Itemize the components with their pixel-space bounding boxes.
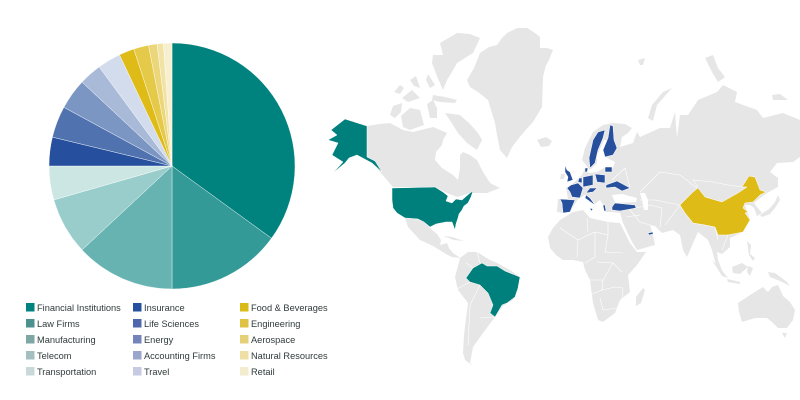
legend column 3: Engineering — [251, 319, 300, 329]
slice: Energy — [64, 82, 172, 166]
highlighted United States: teal — [328, 119, 520, 317]
Svalbard — [638, 58, 645, 65]
legend column 1: Financial Institutions — [37, 303, 121, 313]
Italy — [585, 195, 595, 205]
legend column 2: Life Sciences — [144, 319, 199, 329]
Spain — [560, 199, 575, 213]
Mexico and Central America — [405, 218, 460, 258]
slice: Manufacturing — [82, 166, 172, 289]
slice: Engineering — [134, 45, 172, 166]
Finland — [603, 125, 617, 157]
country borders — [455, 168, 742, 345]
Severnaya Zemlya — [705, 55, 725, 82]
legend column 2: Accounting Firms — [144, 351, 216, 361]
Denmark — [585, 168, 588, 172]
Sweden — [589, 130, 605, 168]
Novaya Zemlya — [648, 88, 672, 121]
legend column 1 — [26, 303, 121, 377]
legend column 3: Aerospace — [251, 335, 295, 345]
New Siberian Islands — [772, 94, 788, 100]
slice: Transportation — [49, 166, 172, 200]
slice: Natural Resources — [157, 43, 172, 166]
Germany — [583, 175, 593, 187]
slice: Aerospace — [148, 44, 172, 166]
Poland — [595, 174, 605, 183]
slice: Life Sciences — [52, 107, 172, 166]
legend — [26, 303, 328, 377]
Eurasia — [557, 85, 800, 273]
Brazil — [466, 263, 520, 317]
legend column 1: Transportation — [37, 367, 96, 377]
Arctic islands — [390, 33, 482, 150]
Iceland — [537, 137, 552, 147]
Czechia and Austria — [586, 188, 597, 193]
Greenland — [467, 28, 553, 158]
seas: Baltic, Black Sea, Caspian — [612, 193, 648, 210]
Madagascar — [636, 288, 645, 306]
Canada — [367, 123, 500, 197]
legend column 1: Telecom — [37, 351, 72, 361]
Africa — [548, 210, 646, 322]
legend column 2: Travel — [144, 367, 169, 377]
Turkey — [612, 203, 636, 211]
legend column 3: Natural Resources — [251, 351, 328, 361]
legend column 3: Food & Beverages — [251, 303, 328, 313]
legend column 3: Retail — [251, 367, 275, 377]
world map — [328, 28, 800, 366]
legend column 1: Law Firms — [37, 319, 80, 329]
France — [567, 183, 583, 198]
grey land masses — [367, 28, 800, 366]
slice: Retail — [163, 43, 172, 166]
Benelux — [578, 178, 582, 183]
Southeast Asia islands — [712, 241, 790, 286]
Tasmania — [782, 333, 787, 338]
Alaska — [328, 119, 382, 173]
Ireland — [560, 174, 565, 179]
slice: Accounting Firms — [82, 67, 172, 166]
Greece — [603, 205, 606, 211]
slice: Food & Beverages — [120, 49, 172, 166]
legend column 1: Manufacturing — [37, 335, 96, 345]
slice: Financial Institutions — [172, 43, 295, 238]
legend column 2 — [133, 303, 216, 377]
South America — [455, 252, 520, 366]
legend column 3 — [240, 303, 328, 377]
slice: Telecom — [54, 166, 172, 250]
highlighted Europe: blue — [560, 125, 653, 235]
highlighted China: yellow — [680, 176, 766, 235]
slice: Law Firms — [172, 166, 272, 289]
legend column 2: Energy — [144, 335, 174, 345]
slice: Travel — [99, 55, 172, 166]
Ukraine and Romania — [606, 181, 630, 191]
Sicily — [590, 208, 593, 211]
slice: Insurance — [49, 137, 172, 166]
Baltics — [605, 167, 612, 172]
Australia — [738, 285, 795, 328]
pie chart — [49, 43, 295, 289]
Japan — [760, 195, 780, 217]
Cuba and Caribbean — [443, 236, 464, 241]
UAE — [648, 232, 653, 235]
USA — [392, 187, 473, 230]
United Kingdom — [565, 165, 573, 182]
legend column 2: Insurance — [144, 303, 185, 313]
